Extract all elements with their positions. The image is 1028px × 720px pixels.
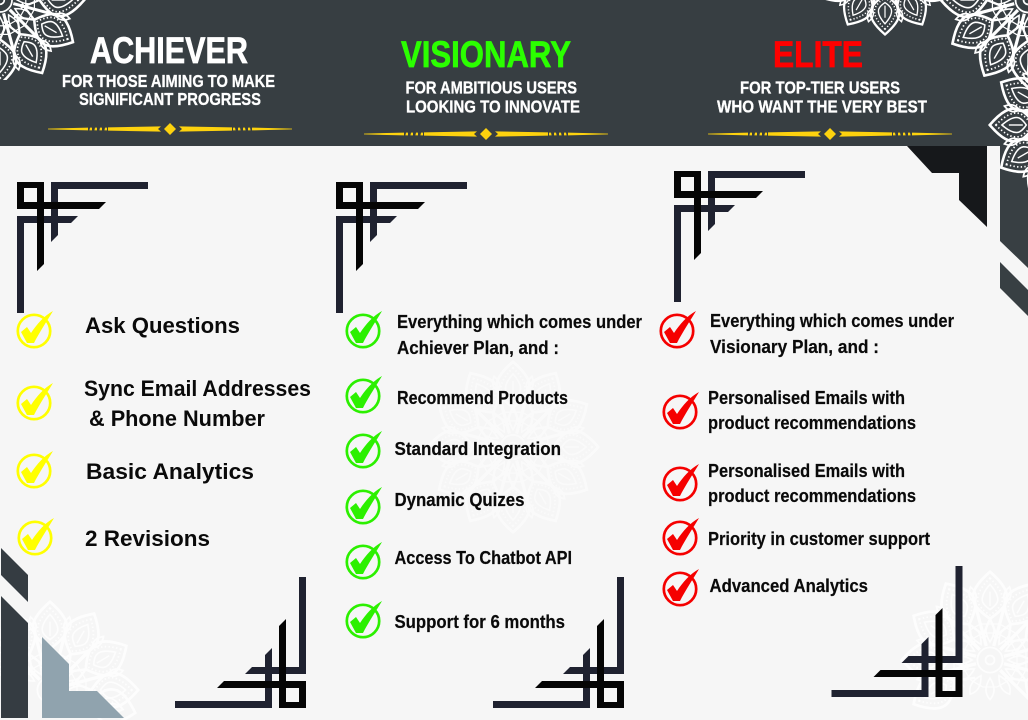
panel: achiever features [18,311,311,554]
heading: achiever [62,29,275,109]
heading: visionary: FOR AMBITIOUS USERS [406,78,577,98]
watermark mandala: bottom left [0,602,140,720]
feature: personalised emails 1: product recommendations [708,413,916,433]
feature: advanced analytics [664,569,868,605]
heading: elite: ELITE [773,33,863,75]
ornament: elite bottom right [832,566,962,697]
heading: visionary: VISIONARY [401,33,571,75]
mandala: header top right [940,0,1028,88]
feature: everything in achiever: Achiever Plan, and : [397,338,559,358]
feature: everything in visionary [661,311,954,357]
ornament: achiever bottom right [175,577,306,708]
mandala: header top [826,0,944,36]
feature: recommend products [347,376,568,412]
feature: everything in visionary: Everything which comes under [710,311,954,331]
feature: standard integration [347,431,561,467]
feature: support: Support for 6 months [394,612,565,632]
ornament: elite top left [674,171,805,302]
ornament: visionary top left [336,182,467,313]
feature: advanced analytics: Advanced Analytics [710,576,868,596]
mandala: header right [988,64,1028,188]
feature: personalised emails 2 [664,461,916,506]
feature: personalised emails 2: Personalised Emails with [708,461,905,481]
feature: revisions: 2 Revisions [85,526,210,551]
feature: personalised emails 1: Personalised Emails with [708,388,905,408]
heading: achiever: FOR THOSE AIMING TO MAKE [62,71,275,91]
heading: elite [717,33,927,117]
ornament: visionary bottom right [493,577,624,708]
feature: ask questions: Ask Questions [85,313,240,338]
feature: sync email: & Phone Number [89,406,265,431]
heading: achiever: SIGNIFICANT PROGRESS [79,89,261,109]
header band [0,0,1028,146]
feature: everything in achiever [347,311,642,358]
feature: basic analytics: Basic Analytics [86,459,254,484]
bottom-left geometric accent [1,548,124,718]
heading: visionary [401,33,580,117]
top-right geometric accent [907,146,1028,316]
feature: revisions [19,518,210,554]
feature: priority support: Priority in customer support [708,529,930,549]
feature: support [347,601,565,637]
feature: ask questions [18,311,240,347]
feature: basic analytics [18,451,254,487]
feature: standard integration: Standard Integration [394,439,561,459]
divider: visionary [364,128,608,140]
feature: sync email: Sync Email Addresses [84,376,311,401]
feature: dynamic quizes [347,487,524,523]
heading: elite: FOR TOP-TIER USERS [740,78,900,98]
divider: achiever [48,123,292,135]
watermark mandala: center [428,362,598,532]
feature: dynamic quizes: Dynamic Quizes [394,490,524,510]
ornament: achiever top left [17,182,148,313]
heading: visionary: LOOKING TO INNOVATE [406,97,580,117]
panel: elite features [661,311,954,605]
feature: chatbot api: Access To Chatbot API [394,548,572,568]
feature: recommend products: Recommend Products [397,388,568,408]
feature: sync email [18,376,311,431]
divider: elite [708,128,952,140]
heading: achiever: ACHIEVER [90,29,248,71]
feature: everything in achiever: Everything which comes under [397,312,642,332]
panel: visionary features [347,311,642,637]
heading: elite: WHO WANT THE VERY BEST [717,97,927,117]
watermark mandala: bottom right [902,572,1028,720]
feature: personalised emails 2: product recommendations [708,486,916,506]
feature: priority support [664,518,930,554]
feature: everything in visionary: Visionary Plan, and : [710,337,879,357]
mandala: header top left [0,0,86,80]
feature: personalised emails 1 [664,388,916,433]
feature: chatbot api [347,542,572,578]
